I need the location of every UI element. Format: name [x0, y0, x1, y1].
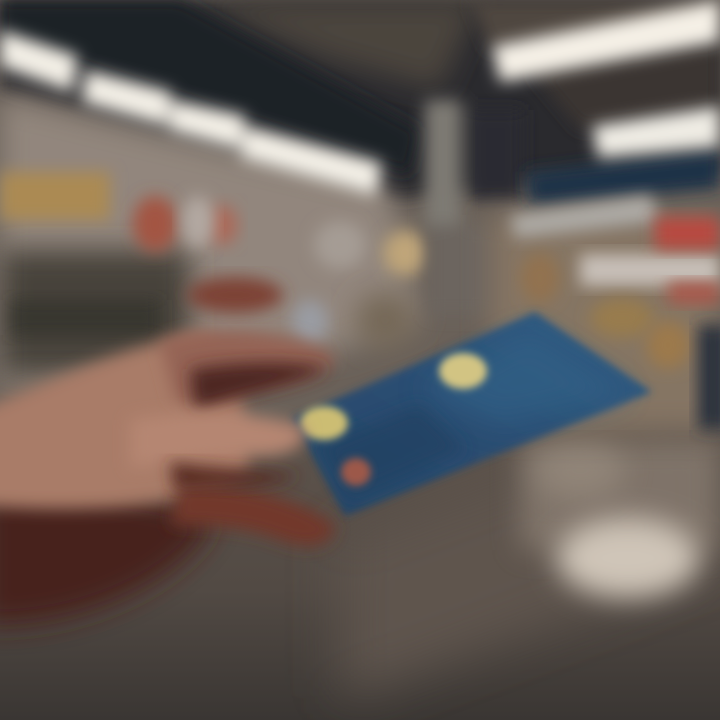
- ring finger: [170, 485, 335, 546]
- left shelves: [0, 95, 427, 390]
- central column: [425, 100, 523, 315]
- ceiling light: lower right: [592, 106, 720, 158]
- floor reflection: [520, 440, 720, 598]
- middle finger: [130, 413, 305, 468]
- index finger: [160, 330, 335, 403]
- hand: [0, 330, 335, 625]
- credit card: [292, 312, 652, 516]
- card chip: upper: [439, 353, 487, 389]
- ceiling light: left strip: [0, 30, 382, 196]
- ceiling: [0, 0, 720, 200]
- floor: [0, 400, 720, 720]
- hand shadow: wrist: [0, 490, 215, 625]
- ceiling light: upper right: [492, 0, 720, 82]
- right shelves: [490, 150, 720, 430]
- palm: [0, 332, 250, 509]
- card logo: [341, 458, 371, 486]
- card chip: lower: [300, 406, 348, 440]
